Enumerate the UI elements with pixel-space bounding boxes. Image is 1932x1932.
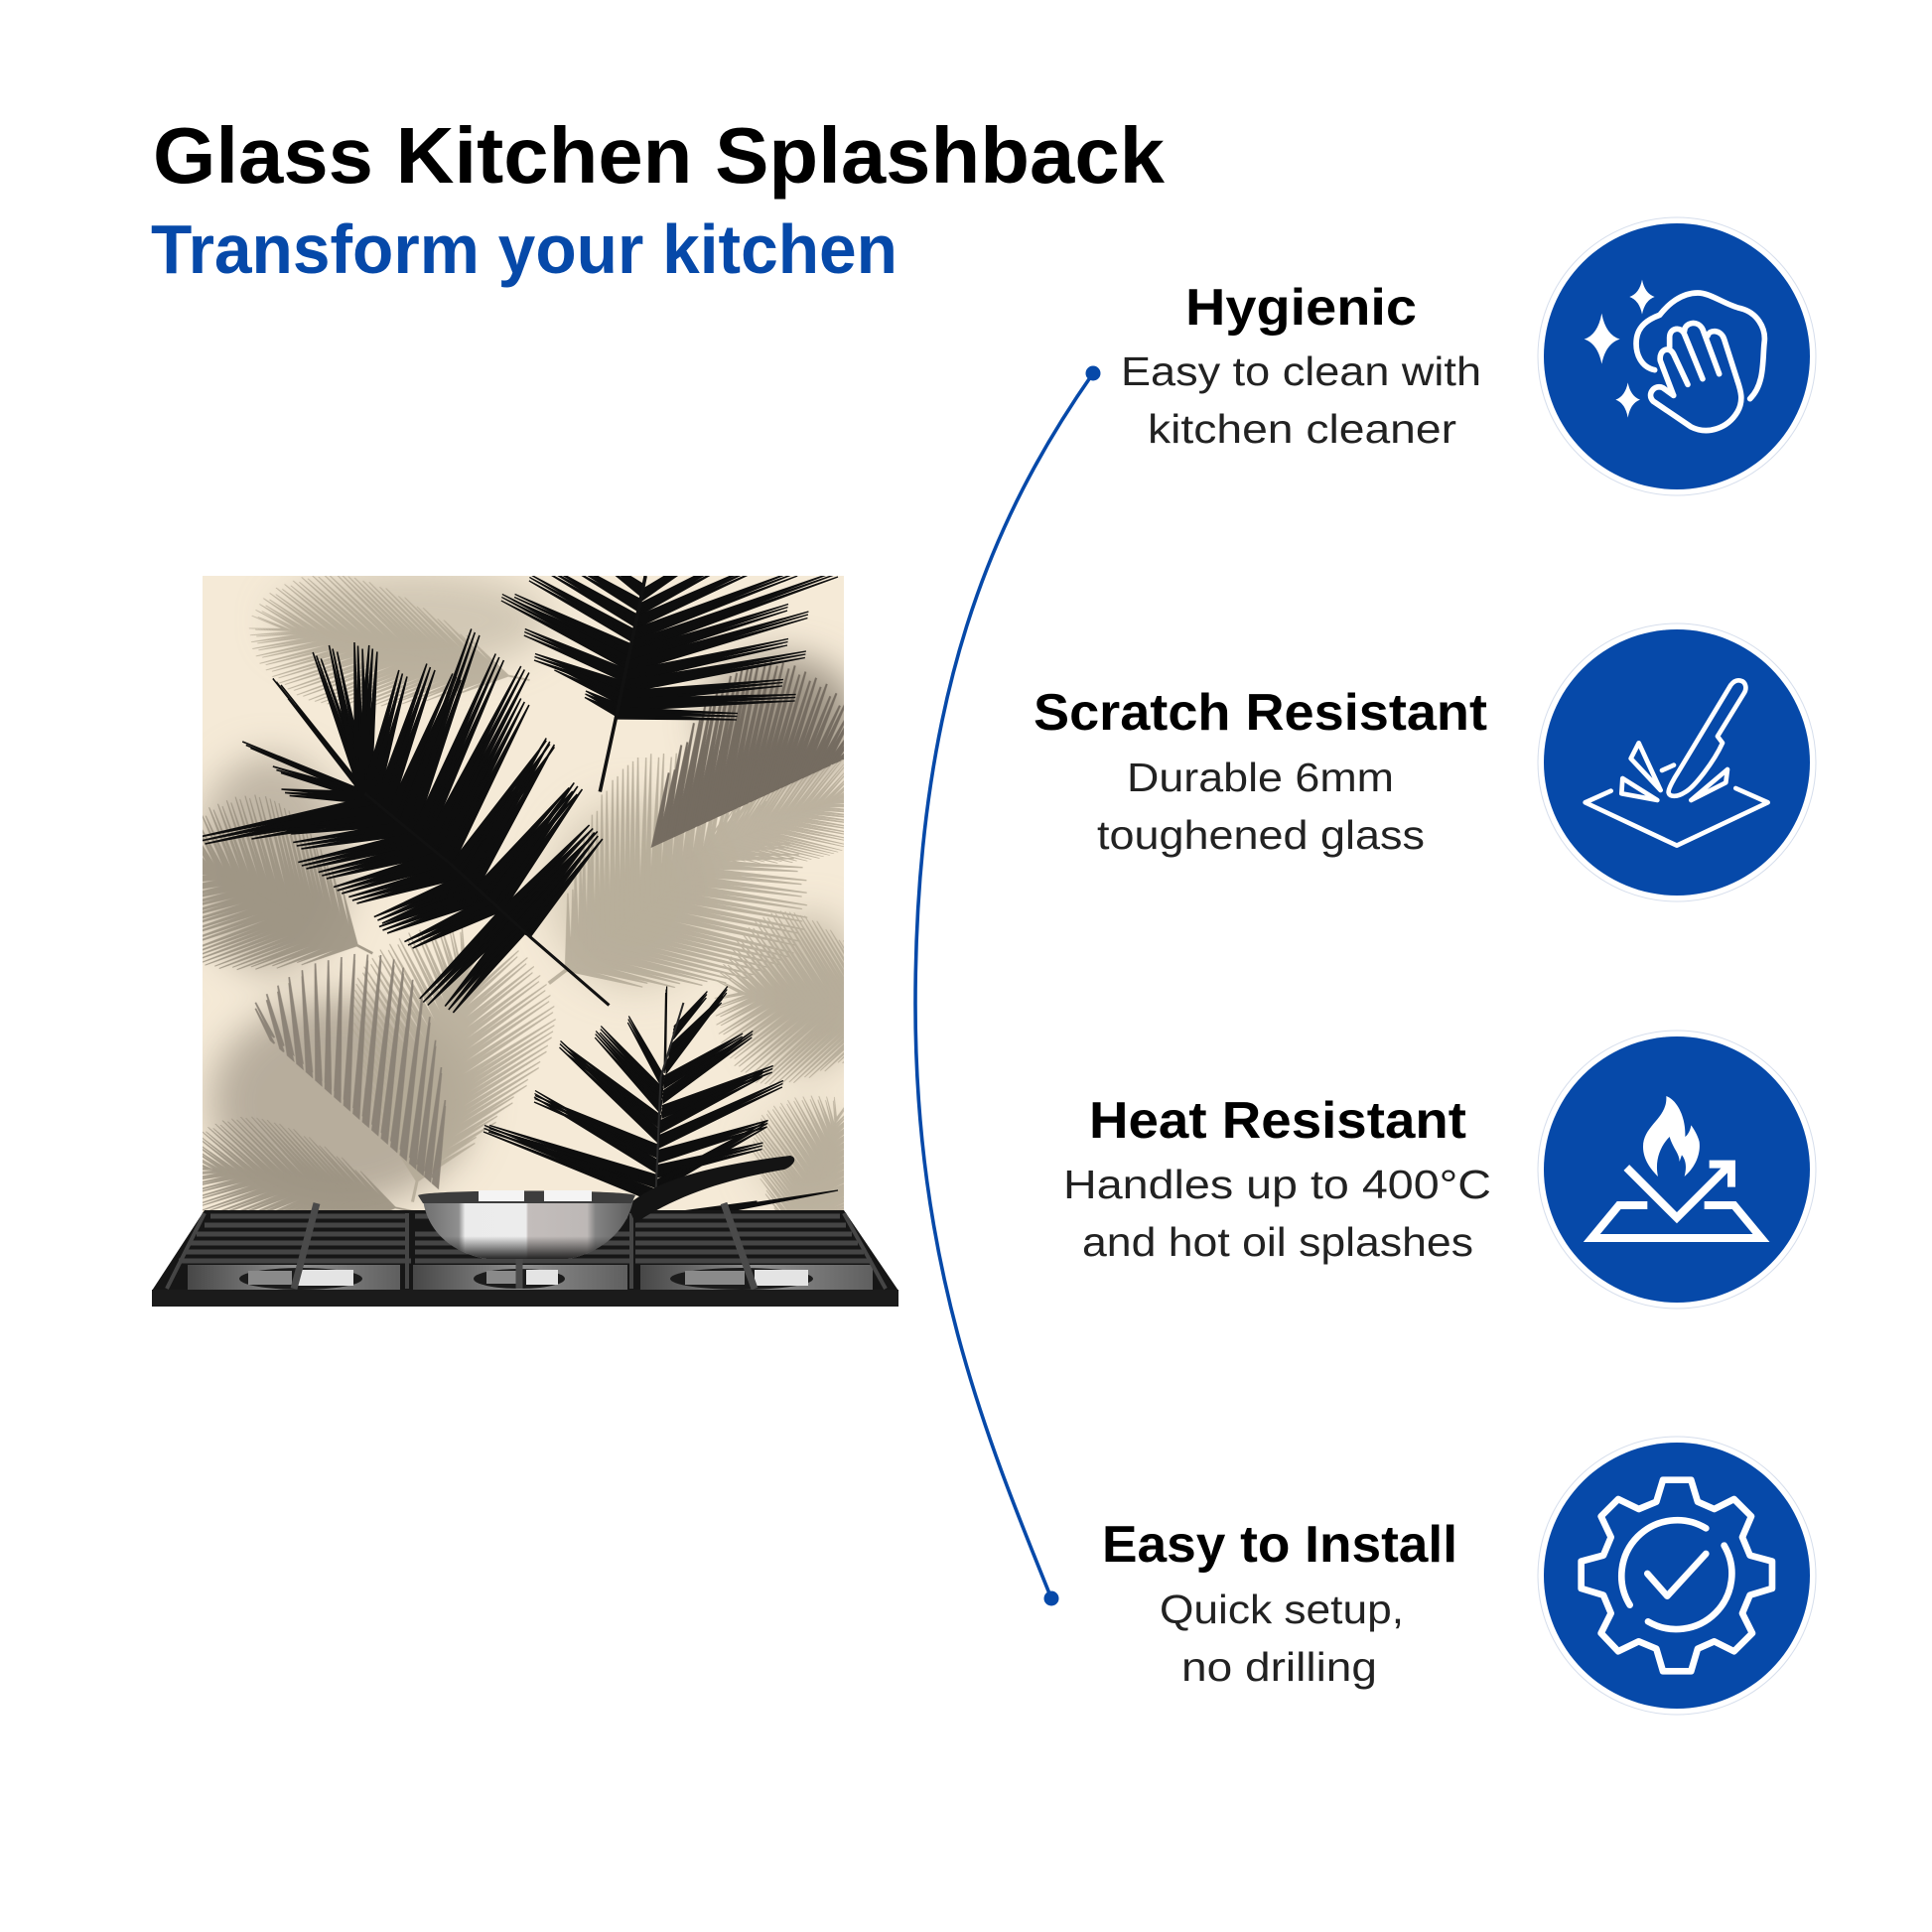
feature text: Hygienic: [1121, 279, 1481, 452]
feature text: Heat Resistant: Heat Resistant: [1089, 1092, 1466, 1150]
black frond large: [197, 629, 609, 1013]
feature text: Heat Resistant: Handles up to 400°C: [1063, 1162, 1491, 1207]
feature text: Easy to Install: [1102, 1516, 1457, 1690]
feature text: Heat Resistant: and hot oil splashes: [1082, 1219, 1473, 1265]
feature text: Scratch Resistant: Durable 6mm: [1127, 755, 1394, 800]
feature text: Scratch Resistant: [1034, 684, 1487, 858]
burner centre: [474, 1269, 565, 1289]
icon: hand wiping with sparkles: [1538, 217, 1816, 495]
feature text: Easy to Install: Quick setup,: [1160, 1587, 1404, 1632]
feature text: Scratch Resistant: Scratch Resistant: [1034, 684, 1487, 742]
connector curve: [915, 365, 1100, 1606]
burner left: [239, 1268, 362, 1290]
feature text: Hygienic: kitchen cleaner: [1148, 406, 1456, 452]
title: Glass Kitchen Splashback: [153, 111, 1166, 200]
icon: flame on heat resistant surface: [1538, 1031, 1816, 1309]
burner right: [670, 1268, 813, 1290]
feature text: Easy to Install: no drilling: [1181, 1644, 1377, 1690]
frying pan: [418, 1156, 794, 1259]
feature text: Heat Resistant: [1063, 1092, 1491, 1265]
feature text: Hygienic: Hygienic: [1185, 279, 1417, 337]
icon: knife scratching glass: [1538, 623, 1816, 901]
subtitle: Transform your kitchen: [151, 210, 897, 288]
feature text: Hygienic: Easy to clean with: [1121, 348, 1481, 394]
icon: gear with check mark: [1538, 1437, 1816, 1715]
cooktop with burners and grates: [152, 1203, 898, 1307]
panel: palm leaf glass splashback: [203, 576, 844, 1213]
feature text: Scratch Resistant: toughened glass: [1097, 812, 1425, 858]
black frond bottom: [483, 987, 838, 1223]
feature text: Easy to Install: Easy to Install: [1102, 1516, 1457, 1574]
black frond top: [501, 560, 839, 792]
